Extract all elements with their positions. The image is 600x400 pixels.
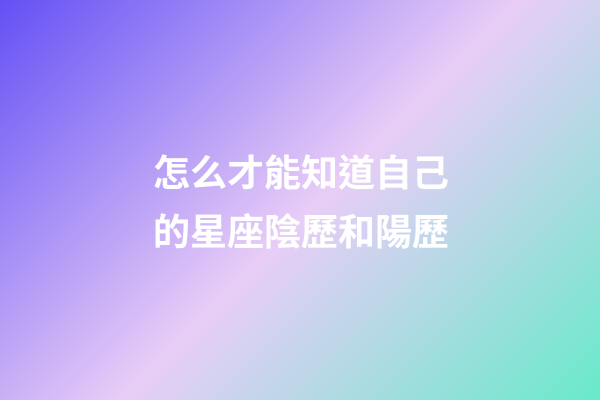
title [153,153,449,253]
title: 的星座陰歷和陽歷 [153,212,449,253]
title: 怎么才能知道自己 [153,153,449,194]
